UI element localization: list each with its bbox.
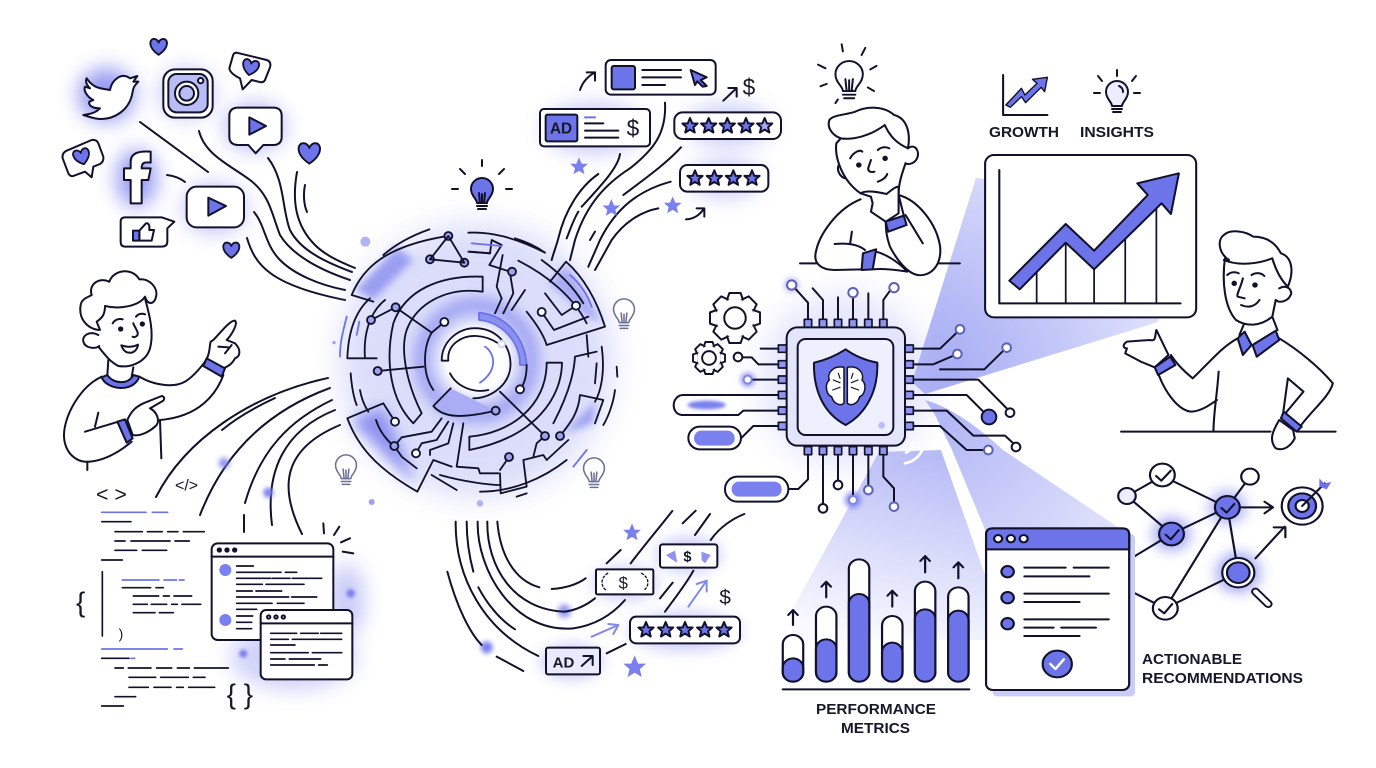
dollar bill: $ <box>619 573 628 592</box>
light beam: chip to recommendations <box>925 400 1125 532</box>
label: actionable recommendations <box>1142 651 1303 687</box>
stars <box>623 523 646 677</box>
gears <box>693 293 760 374</box>
ad card with price: $ <box>627 115 640 141</box>
flow lines: social to hub <box>140 122 355 300</box>
browser window small <box>261 610 352 679</box>
flow lines: code to hub <box>156 378 340 534</box>
code symbols: { } <box>227 678 253 709</box>
ads and ratings top <box>540 60 781 270</box>
sparkle highlights <box>905 443 923 463</box>
growth arrow <box>1009 173 1179 289</box>
ad card with price: AD <box>550 121 572 138</box>
stars and arrow <box>602 196 704 219</box>
performance metrics bar chart <box>783 556 969 689</box>
code panel with browser windows <box>76 478 365 709</box>
dollar card with wings <box>660 544 717 568</box>
up arrows <box>788 556 963 625</box>
purple arrows <box>592 581 707 637</box>
code symbols: { <box>76 586 85 617</box>
icon: bulb with rays <box>818 44 877 103</box>
icon: insights bulb <box>1094 70 1140 112</box>
AD tag: AD <box>553 654 574 671</box>
social media icon cluster <box>62 39 320 258</box>
label: growth: GROWTH <box>989 124 1059 141</box>
code symbols: ) <box>119 625 123 641</box>
network nodes <box>1118 464 1259 620</box>
dollar sign: $ <box>719 586 731 609</box>
AD tag <box>546 648 600 674</box>
shield with brain <box>814 349 877 425</box>
icon: facebook f <box>124 151 151 203</box>
label: performance metrics <box>816 701 936 737</box>
recommendation network <box>1118 464 1331 620</box>
pins <box>778 319 913 455</box>
icon: target with arrow <box>1282 478 1331 525</box>
five star rating <box>630 617 740 643</box>
arrow and dollar <box>723 74 756 101</box>
light beam: chip to performance metrics <box>792 450 985 640</box>
dollar bill <box>596 569 653 594</box>
arrow up <box>580 72 595 90</box>
AI chip with shield and brain <box>674 278 1020 513</box>
traces <box>795 288 890 320</box>
central circuit maze hub <box>332 223 617 507</box>
icon: faded bulb lower <box>584 458 604 487</box>
code lines <box>102 522 228 706</box>
icon: heart speech bubble top <box>229 53 270 89</box>
icon: instagram <box>163 69 213 118</box>
star free <box>570 157 588 174</box>
hub nodes <box>367 232 564 461</box>
icon: growth mini chart <box>1003 75 1047 115</box>
code symbols: < > <box>96 482 127 506</box>
pills <box>687 401 788 502</box>
label: performance metrics: PERFORMANCE <box>816 701 936 718</box>
five star rating <box>674 112 781 139</box>
check badge <box>1043 651 1072 677</box>
character: pointing person <box>64 271 239 470</box>
ad card with cursor <box>606 60 716 95</box>
icon: faded bulb left <box>336 455 356 484</box>
icon: heart lower <box>223 243 239 258</box>
icon: twitter bird <box>83 76 138 119</box>
code symbols <box>76 478 253 709</box>
dollar card with wings: $ <box>683 550 691 566</box>
icon: magnifier <box>1222 558 1268 604</box>
arrow and dollar: $ <box>743 74 756 100</box>
icon: faded bulb right <box>614 299 634 328</box>
character: thinking person <box>800 44 960 275</box>
label: actionable recommendations: ACTIONABLE <box>1142 651 1242 668</box>
label: actionable recommendations: RECOMMENDATIONS <box>1142 670 1303 687</box>
icon: heart right <box>299 143 320 164</box>
icon: heart top <box>150 39 167 55</box>
label: performance metrics: METRICS <box>841 720 910 737</box>
four star rating <box>680 165 768 192</box>
recommendation report window <box>986 528 1135 696</box>
character: presenting person <box>1121 231 1336 449</box>
light beam: chip to growth chart <box>912 178 1190 394</box>
browser window large <box>212 543 333 640</box>
icon: play button <box>187 187 244 227</box>
icon: bulb above hub <box>452 160 512 209</box>
ad card with price <box>540 109 650 146</box>
growth chart panel <box>985 155 1196 317</box>
trace terminals <box>734 353 1020 513</box>
icon: thumbs up bubble <box>121 217 174 247</box>
ads and ratings bottom <box>447 511 744 680</box>
label: insights: INSIGHTS <box>1080 124 1154 141</box>
icon: heart speech bubble left <box>62 140 103 177</box>
code symbols: </> <box>175 478 198 495</box>
icon: play bubble top <box>229 108 282 153</box>
